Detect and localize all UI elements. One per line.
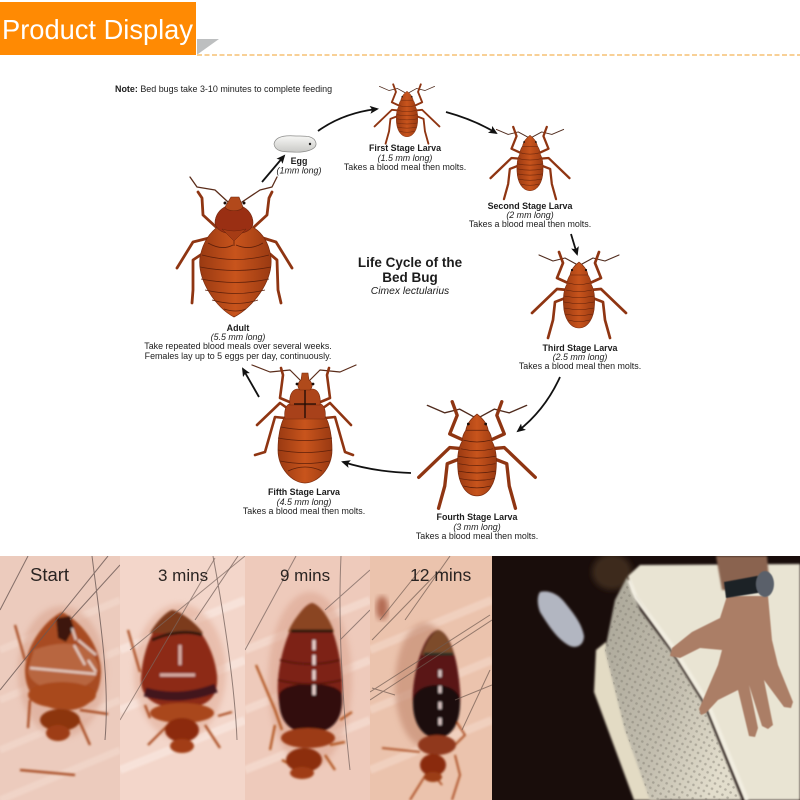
stage: fifth larva	[243, 365, 365, 516]
box spring	[594, 642, 660, 800]
stage: second larva	[469, 127, 591, 229]
stage: third larva	[519, 252, 641, 371]
stage: third larva: (2.5 mm long)	[553, 352, 607, 362]
stage: adult: (5.5 mm long)	[211, 332, 265, 342]
mattress top	[628, 564, 800, 800]
hand	[670, 596, 793, 737]
stage: fifth larva: (4.5 mm long)	[277, 497, 331, 507]
photo labels: feeding time	[30, 564, 472, 585]
photo: 9 minutes	[245, 556, 370, 800]
stage: adult: Females lay up to 5 eggs per day, continuously.	[145, 351, 331, 361]
stage: egg: (1mm long)	[277, 166, 321, 176]
photo: feeding start	[0, 556, 120, 800]
stage: first larva: First Stage Larva	[369, 143, 441, 153]
diagram title: Life Cycle of the	[358, 255, 463, 270]
stage: second larva: Second Stage Larva	[488, 201, 572, 211]
stage: third larva: Takes a blood meal then molts.	[519, 361, 641, 371]
sneaker	[538, 591, 584, 647]
banner title: Product Display	[2, 14, 193, 45]
photo: man lifting infested mattress	[492, 554, 800, 800]
stage: adult	[144, 177, 332, 361]
stage: second larva: (2 mm long)	[506, 210, 554, 220]
wristwatch	[724, 571, 774, 598]
photo labels: feeding time: 9 mins	[280, 566, 330, 585]
stage: fifth larva: Fifth Stage Larva	[268, 487, 340, 497]
stage: fourth larva: Takes a blood meal then molts.	[416, 531, 538, 541]
stage: fifth larva: Takes a blood meal then molts.	[243, 506, 365, 516]
banner fold triangle	[197, 39, 219, 54]
feeding note: Note: Bed bugs take 3-10 minutes to complete feeding	[115, 84, 332, 94]
stage: egg	[274, 136, 321, 176]
forearm	[716, 556, 770, 590]
arrows between stages	[243, 109, 577, 473]
diagram title: Bed Bug	[382, 270, 438, 285]
stage: first larva: (1.5 mm long)	[378, 153, 432, 163]
photo labels: feeding time: 12 mins	[410, 565, 472, 585]
mattress side	[605, 577, 742, 800]
stage: fourth larva	[416, 402, 538, 541]
header banner	[0, 2, 219, 55]
side quilting dots	[605, 577, 742, 800]
stage: second larva: Takes a blood meal then molts.	[469, 219, 591, 229]
diagram title: Cimex lectularius	[371, 286, 449, 297]
stage: adult: Take repeated blood meals over several weeks.	[144, 341, 332, 351]
photo: 3 minutes	[120, 556, 245, 800]
stage: third larva: Third Stage Larva	[543, 343, 618, 353]
diagram title	[358, 255, 463, 297]
photo labels: feeding time: Start	[30, 564, 69, 585]
stage: first larva	[344, 84, 466, 172]
stage: first larva: Takes a blood meal then molts.	[344, 162, 466, 172]
photo labels: feeding time: 3 mins	[158, 566, 208, 585]
photo: 12 minutes	[370, 556, 492, 800]
stage: fourth larva: (3 mm long)	[453, 522, 501, 532]
stage: fourth larva: Fourth Stage Larva	[437, 512, 517, 522]
stage: egg: Egg	[291, 156, 307, 166]
stage: adult: Adult	[227, 323, 249, 333]
